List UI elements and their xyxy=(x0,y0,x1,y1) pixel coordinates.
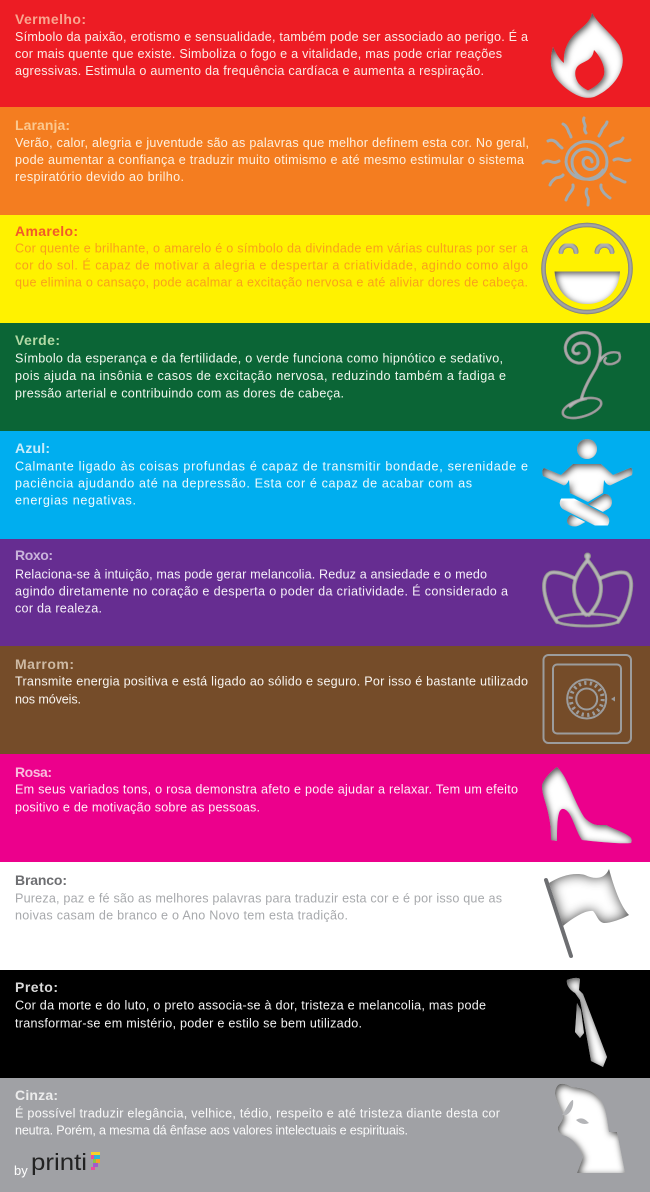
text: Vermelho description: Símbolo da paixão, erotismo e sensualidade, também pode ser associado ao perigo. É a xyxy=(15,29,528,44)
text: Azul description xyxy=(15,460,528,508)
text: Laranja description xyxy=(15,136,529,184)
text: Branco description xyxy=(15,892,502,922)
panel: Cinza xyxy=(0,1078,650,1192)
icon: crown xyxy=(544,552,631,626)
text: Amarelo description: Cor quente e brilhante, o amarelo é o símbolo da divindade em várias culturas por ser a xyxy=(15,242,528,256)
heading: Marrom: Marrom: xyxy=(15,656,74,672)
text: Cinza description: É possível traduzir elegância, velhice, tédio, respeito e até tristeza diante desta cor xyxy=(15,1106,500,1120)
heading: Verde: Verde: xyxy=(15,332,60,348)
icon: sprout xyxy=(560,333,620,422)
text: Cinza description: neutra. Porém, a mesma dá ênfase aos valores intelectuais e espirituais. xyxy=(15,1124,408,1138)
logo: by printi xyxy=(14,1149,100,1178)
icon: printi pixel mark xyxy=(91,1152,100,1170)
icon: thinking head xyxy=(555,1084,625,1173)
text: Rosa description xyxy=(15,782,518,814)
text: Verde description: Símbolo da esperança e da fertilidade, o verde funciona como hipnótico e sedativo, xyxy=(15,352,503,366)
panel: Preto xyxy=(0,970,650,1078)
text: Azul description: Calmante ligado às coisas profundas é capaz de transmitir bondade, serenidade e xyxy=(15,460,528,474)
heading: Cinza: Cinza: xyxy=(15,1087,58,1103)
text: Preto description: transformar-se em mistério, poder e estilo se bem utilizado. xyxy=(15,1016,362,1030)
text: Roxo description: cor da realeza. xyxy=(15,602,102,616)
text: Cinza description xyxy=(15,1106,500,1138)
text: Preto description: Cor da morte e do luto, o preto associa-se à dor, tristeza e melancolia, mas pode xyxy=(15,998,486,1012)
text: Laranja description: Verão, calor, alegria e juventude são as palavras que melhor definem esta cor. No geral, xyxy=(15,136,529,150)
panel: Verde xyxy=(0,323,650,431)
text: Verde description: pois ajuda na insônia e casos de excitação nervosa, reduzindo também a fadiga e xyxy=(15,369,506,383)
text: Verde description xyxy=(15,352,506,400)
heading: Roxo: Roxo: xyxy=(15,547,53,563)
icon: safe xyxy=(544,655,631,743)
text: Branco description: Pureza, paz e fé são as melhores palavras para traduzir esta cor e é por isso que as xyxy=(15,892,502,906)
text: Marrom description: nos móveis. xyxy=(15,692,81,706)
icon: sun xyxy=(543,118,630,205)
text: Roxo description: Relaciona-se à intuição, mas pode gerar melancolia. Reduz a ansiedade e o medo xyxy=(15,568,487,582)
icon: high heel shoe xyxy=(542,767,632,843)
panel: Amarelo xyxy=(0,215,650,323)
heading: Preto: Preto: xyxy=(15,979,58,995)
text: Vermelho description: agressivas. Estimula o aumento da frequência cardíaca e aumenta a respiração. xyxy=(15,64,484,78)
text: Amarelo description: que elimina o cansaço, pode acalmar a excitação nervosa e até aliviar dores de cabeça. xyxy=(15,276,528,290)
icon: necktie xyxy=(567,978,607,1067)
text: Vermelho description xyxy=(15,29,528,78)
panel: Branco xyxy=(0,862,650,970)
text: Marrom description xyxy=(15,674,528,706)
heading: Vermelho: Vermelho: xyxy=(15,11,86,27)
panel: Laranja xyxy=(0,107,650,215)
logo: by printi: printi xyxy=(31,1149,87,1175)
heading: Azul: Azul: xyxy=(15,440,50,456)
panel: Roxo xyxy=(0,539,650,646)
panel: Marrom xyxy=(0,646,650,754)
text: Laranja description: pode aumentar a confiança e traduzir muito otimismo e até mesmo estimular o sistema xyxy=(15,153,524,167)
text: Rosa description: Em seus variados tons, o rosa demonstra afeto e pode ajudar a relaxar. Tem um efeito xyxy=(15,782,518,796)
text: Laranja description: respiratório devido ao brilho. xyxy=(15,170,184,184)
text: Amarelo description xyxy=(15,242,528,290)
text: Roxo description xyxy=(15,568,508,616)
text: Preto description xyxy=(15,998,486,1030)
text: Amarelo description: cor do sol. É capaz de motivar a alegria e despertar a criatividade, agindo como algo xyxy=(15,258,528,272)
heading: Branco: Branco: xyxy=(15,872,67,888)
heading: Rosa: Rosa: xyxy=(15,764,52,780)
text: Vermelho description: cor mais quente que existe. Simboliza o fogo e a vitalidade, mas pode criar reações xyxy=(15,47,502,61)
text: Azul description: paciência ajudando até na depressão. Esta cor é capaz de acabar com as xyxy=(15,476,472,490)
heading: Amarelo: Amarelo: xyxy=(15,223,78,239)
icon: smiley xyxy=(544,225,630,312)
panel: Rosa xyxy=(0,754,650,862)
text: Verde description: pressão arterial e contribuindo com as dores de cabeça. xyxy=(15,386,344,400)
text: Rosa description: positivo e de motivação sobre as pessoas. xyxy=(15,800,260,814)
text: Branco description: noivas casam de branco e o Ano Novo tem esta tradição. xyxy=(15,908,348,922)
text: Azul description: energias negativas. xyxy=(15,494,136,508)
logo: by printi: by xyxy=(14,1163,28,1178)
text: Roxo description: agindo diretamente no coração e desperta o poder da criatividade. É considerado a xyxy=(15,584,508,598)
panel: Azul xyxy=(0,431,650,539)
text: Marrom description: Transmite energia positiva e está ligado ao sólido e seguro. Por isso é bastante utilizado xyxy=(15,674,528,688)
panel: Vermelho xyxy=(0,0,650,107)
heading: Laranja: Laranja: xyxy=(15,117,70,133)
icon: flame xyxy=(551,13,623,98)
icon: white flag xyxy=(546,869,629,956)
icon: meditating person xyxy=(542,439,632,526)
